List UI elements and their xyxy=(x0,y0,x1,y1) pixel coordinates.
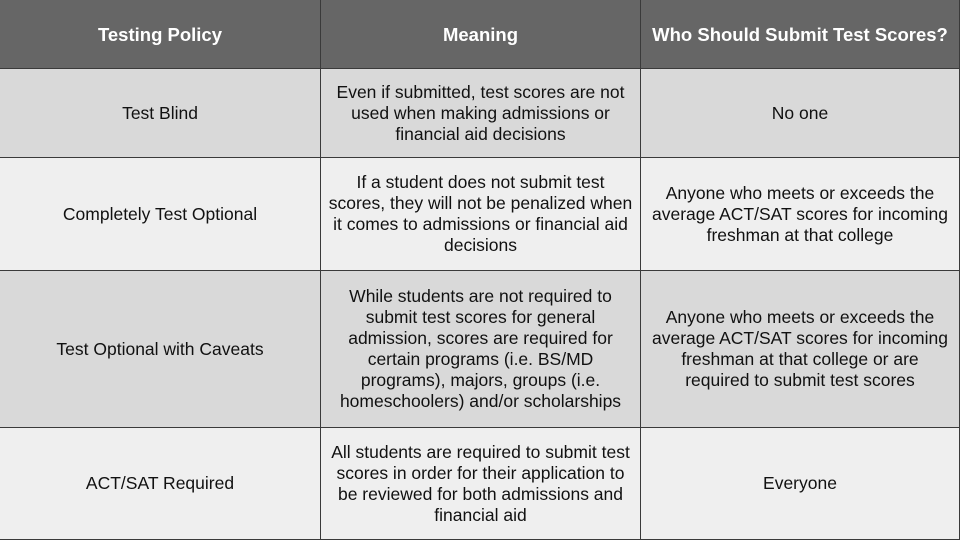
row 2 who xyxy=(641,158,960,271)
header: Testing Policy xyxy=(0,0,321,69)
row 4 policy: ACT/SAT Required xyxy=(86,473,234,493)
row 3 meaning: While students are not required to submit test scores for general admission, scores are required for certain programs (i.e. BS/MD programs), majors, groups (i.e. homeschoolers) and/or scholarships xyxy=(340,286,621,411)
header: Who Should Submit xyxy=(641,0,960,69)
row 4 policy xyxy=(0,428,321,540)
row 4 meaning: All students are required to submit test scores in order for their application to be reviewed for both admissions and financial aid xyxy=(331,442,630,524)
row 3 who xyxy=(641,271,960,428)
row 4 who xyxy=(641,428,960,540)
row 2 policy: Completely Test Optional xyxy=(63,204,257,224)
row 3 policy xyxy=(0,271,321,428)
row 3 who: Anyone who meets or exceeds the average ACT/SAT scores for incoming freshman at that college or are required to submit test scores xyxy=(652,307,948,390)
row 4 who: Everyone xyxy=(763,473,837,493)
row 2 policy xyxy=(0,158,321,271)
row 1 policy: Test Blind xyxy=(122,102,198,122)
header: Meaning xyxy=(321,0,641,69)
row 3 meaning xyxy=(321,271,641,428)
row 1 meaning: Even if submitted, test scores are not used when making admissions or financial aid decisions xyxy=(337,82,624,144)
row 2 meaning xyxy=(321,158,641,271)
row 1 meaning xyxy=(321,69,641,158)
row 2 who: Anyone who meets or exceeds the average ACT/SAT scores for incoming freshman at that college xyxy=(652,182,948,244)
row 1 who: No one xyxy=(772,102,828,122)
row 1 policy xyxy=(0,69,321,158)
header: Who Should Submit: Who Should Submit Test Scores? xyxy=(652,24,948,44)
header: Testing Policy: Testing Policy xyxy=(98,24,222,44)
row 1 who xyxy=(641,69,960,158)
row 3 policy: Test Optional with Caveats xyxy=(56,338,264,358)
row 2 meaning: If a student does not submit test scores, they will not be penalized when it comes to admissions or financial aid decisions xyxy=(329,172,632,255)
row 4 meaning xyxy=(321,428,641,540)
header: Meaning: Meaning xyxy=(443,24,518,44)
